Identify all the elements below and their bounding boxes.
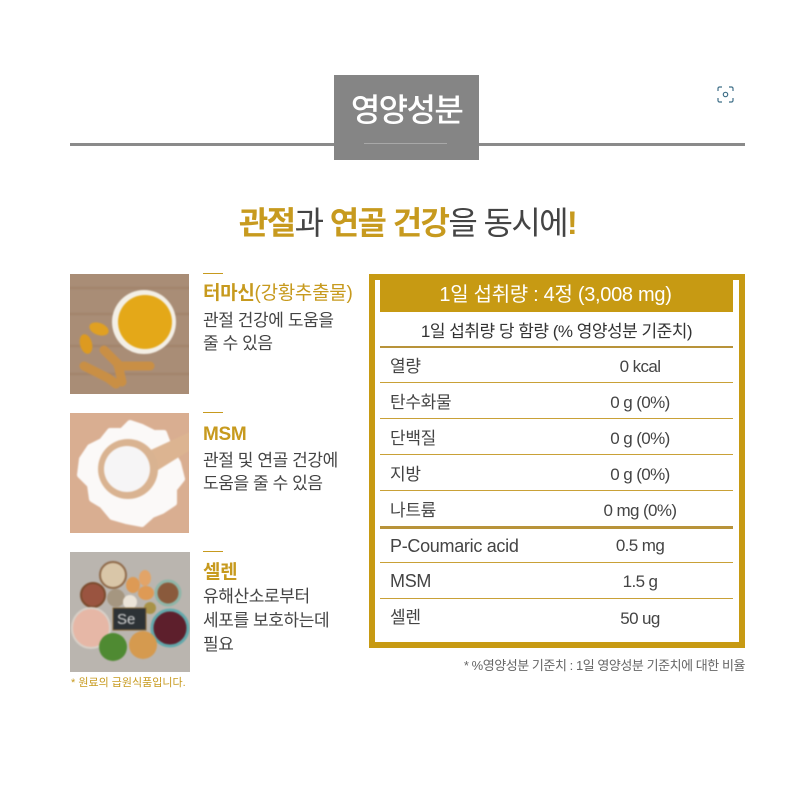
row: selenium: 셀렌 bbox=[390, 608, 421, 627]
ingredient description: 줄 수 있음 bbox=[203, 334, 273, 353]
ingredient: turmeric bbox=[203, 273, 353, 353]
title box bbox=[334, 75, 479, 160]
row: selenium bbox=[390, 608, 660, 628]
row: MSM bbox=[390, 571, 657, 591]
row: P-Coumaric acid: P-Coumaric acid bbox=[390, 536, 519, 556]
row: carbohydrate bbox=[390, 393, 670, 412]
header rule bbox=[70, 143, 745, 146]
ingredient description: 관절 건강에 도움을 bbox=[203, 311, 334, 330]
ingredient description bbox=[203, 587, 329, 654]
ingredient description: 유해산소로부터 bbox=[203, 587, 310, 606]
row: carbohydrate: 탄수화물 bbox=[390, 393, 451, 412]
ingredient name: 셀렌 bbox=[203, 562, 237, 583]
row: P-Coumaric acid: 0.5 mg bbox=[616, 536, 664, 555]
row: sodium: 0 mg (0%) bbox=[603, 501, 676, 520]
title underline bbox=[364, 143, 447, 144]
table subheader: 1일 섭취량 당 함량 (% 영양성분 기준치) bbox=[421, 322, 692, 341]
title text: 영양성분 bbox=[351, 92, 462, 128]
row: calories: 열량 bbox=[390, 357, 421, 376]
table header band: 1일 섭취량 : 4정 (3,008 mg) bbox=[439, 284, 672, 306]
row: sodium bbox=[390, 501, 676, 520]
table header band bbox=[380, 280, 733, 312]
row: protein: 단백질 bbox=[390, 429, 436, 448]
row: MSM: MSM bbox=[390, 571, 431, 591]
row: calories: 0 kcal bbox=[620, 357, 660, 376]
ingredient: MSM bbox=[203, 412, 338, 493]
row: fat: 지방 bbox=[390, 465, 421, 484]
photo: selenium foods bbox=[70, 552, 190, 672]
ingredient description bbox=[203, 311, 334, 353]
row: protein bbox=[390, 429, 670, 448]
row: protein: 0 g (0%) bbox=[610, 429, 670, 448]
row: MSM: 1.5 g bbox=[623, 572, 657, 591]
ingredient description: 필요 bbox=[203, 635, 233, 654]
ingredient description: 관절 및 연골 건강에 bbox=[203, 451, 338, 470]
nutrition table bbox=[369, 274, 745, 648]
row: calories bbox=[390, 357, 660, 376]
row: P-Coumaric acid bbox=[390, 536, 664, 556]
ingredient: selenium bbox=[203, 551, 329, 654]
row: selenium: 50 ug bbox=[620, 609, 660, 628]
table footnote: * %영양성분 기준치 : 1일 영양성분 기준치에 대한 비율 bbox=[464, 658, 745, 673]
row: carbohydrate: 0 g (0%) bbox=[610, 393, 670, 412]
photo: selenium foods: Se bbox=[117, 611, 135, 628]
image footnote: * 원료의 급원식품입니다. bbox=[71, 677, 186, 689]
ingredient description: 도움을 줄 수 있음 bbox=[203, 474, 323, 493]
photo: turmeric bbox=[70, 274, 189, 394]
ingredient description: 세포를 보호하는데 bbox=[203, 611, 329, 630]
subtitle: 관절과 연골 건강을 동시에! bbox=[239, 205, 576, 241]
row: fat: 0 g (0%) bbox=[610, 465, 670, 484]
ingredient name: MSM bbox=[203, 424, 246, 445]
ingredient description bbox=[203, 451, 338, 493]
row: fat bbox=[390, 465, 670, 484]
icon: scan lens bbox=[717, 86, 734, 103]
ingredient name: 터마신(강황추출물) bbox=[203, 283, 353, 304]
row: sodium: 나트륨 bbox=[390, 501, 436, 520]
photo: MSM bbox=[70, 413, 189, 533]
